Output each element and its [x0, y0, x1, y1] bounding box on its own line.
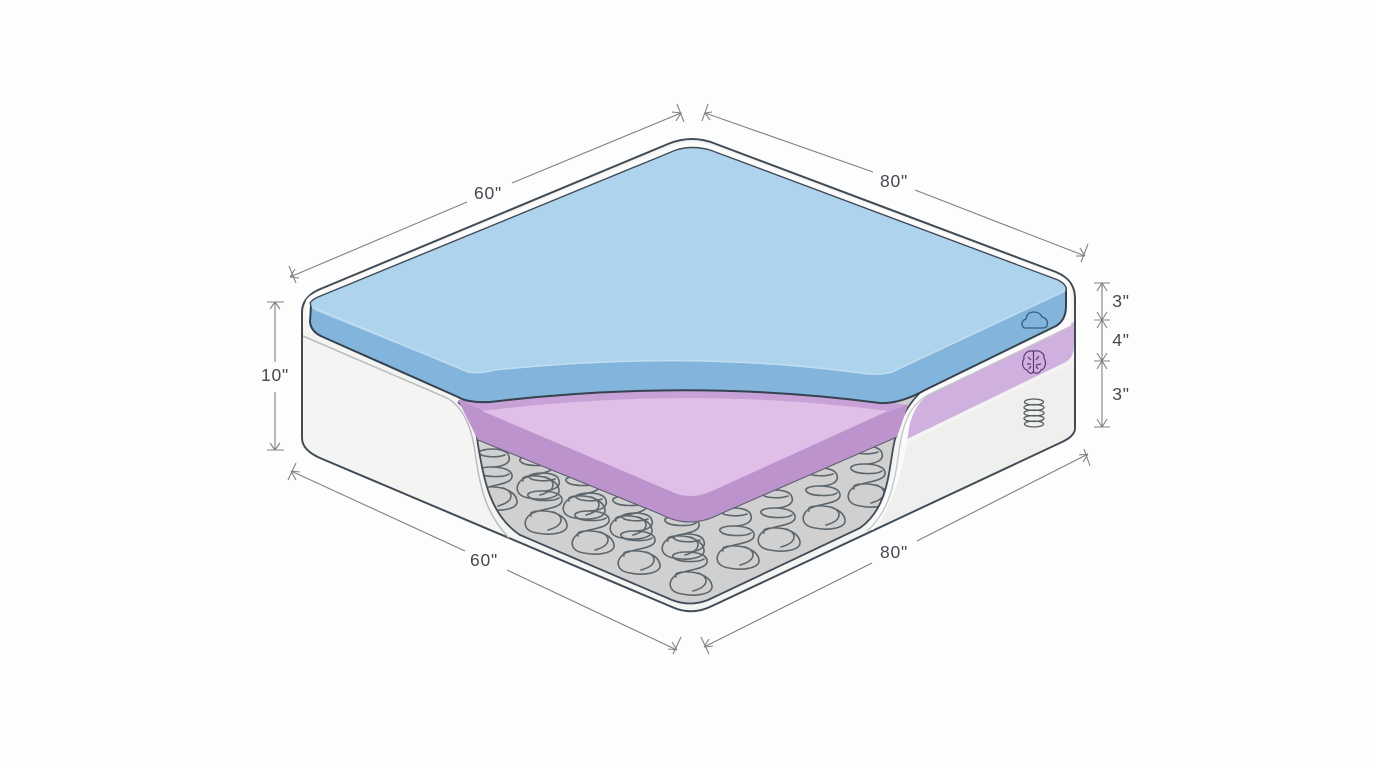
- purple strip: [464, 389, 906, 413]
- dimension: layer heights 3, 4, 3 in: [1094, 283, 1130, 427]
- icon: spring: [1024, 399, 1044, 427]
- dimension: layer heights 3, 4, 3 in: 4": [1112, 330, 1130, 350]
- springs: [475, 438, 890, 595]
- icon: brain: [1023, 351, 1045, 373]
- dimension: bottom left width 60 in: [288, 463, 681, 654]
- mattress body: [302, 139, 1075, 611]
- right body shade: [880, 362, 1074, 526]
- dimension: top left width 60 in: 60": [474, 183, 502, 203]
- white rim: [870, 322, 1070, 528]
- blue cooling layer side: [310, 288, 1066, 403]
- dimension: bottom left width 60 in: 60": [470, 550, 498, 570]
- dimension: bottom right length 80 in: [701, 449, 1090, 654]
- spring cavity floor: [458, 388, 925, 604]
- dimension: layer heights 3, 4, 3 in: 3": [1112, 384, 1130, 404]
- purple outline at cavity: [478, 437, 897, 522]
- white rim around top layer: [310, 148, 1066, 392]
- purple comfort layer slab: [458, 389, 908, 522]
- dimension: top left width 60 in: [289, 104, 684, 283]
- cavity outline: [458, 388, 925, 604]
- dimension: height 10 in: [261, 302, 289, 450]
- dimension: top right length 80 in: [702, 104, 1088, 262]
- dimension: top right length 80 in: 80": [880, 171, 908, 191]
- mattress illustration: [302, 139, 1075, 611]
- icon: cloud: [1022, 312, 1047, 328]
- rim line, left: [303, 336, 509, 538]
- blue top highlight edge: [312, 291, 1065, 374]
- purple top face: [482, 398, 888, 496]
- blue cooling layer top face: [311, 148, 1066, 374]
- purple layer band, right side: [903, 322, 1074, 441]
- dimension: height 10 in: 10": [261, 365, 289, 385]
- dimension: layer heights 3, 4, 3 in: 3": [1112, 291, 1130, 311]
- dimension: bottom right length 80 in: 80": [880, 542, 908, 562]
- rim line, right: [867, 327, 1070, 531]
- blue top outline at rear: [310, 148, 1066, 305]
